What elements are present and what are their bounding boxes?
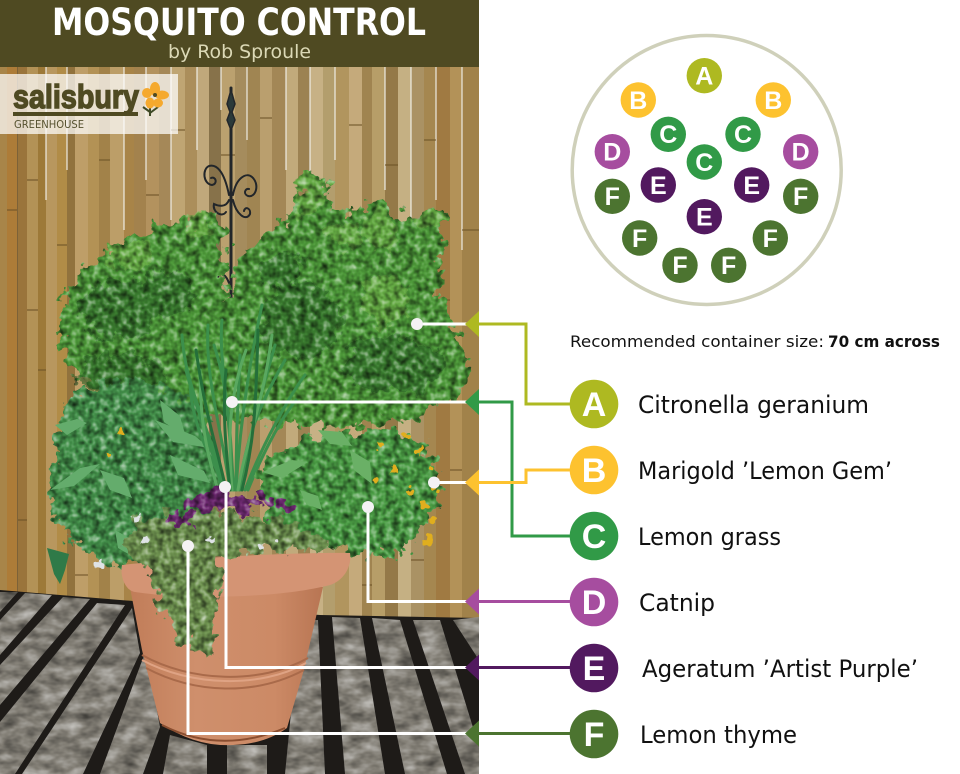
positions B: B xyxy=(629,87,647,115)
legend C: Lemon grass: Lemon grass xyxy=(638,523,781,551)
legend B: Marigold 'Lemon Gem' xyxy=(570,446,892,494)
connector D xyxy=(362,501,572,614)
positions F: F xyxy=(632,225,647,253)
positions C xyxy=(651,117,761,180)
positions D: D xyxy=(792,138,810,166)
positions F xyxy=(595,179,818,283)
logo: Salisbury Greenhouse: GREENHOUSE xyxy=(14,119,84,131)
terracotta pot xyxy=(122,553,350,745)
title: MOSQUITO CONTROL xyxy=(52,1,426,44)
logo: Salisbury Greenhouse: salisbury xyxy=(13,78,140,115)
plant A: citronella geranium bush xyxy=(59,172,467,426)
planting plan circle diagram xyxy=(572,36,841,304)
legend A: Citronella geranium xyxy=(570,380,869,428)
positions C: C xyxy=(695,149,713,177)
positions F: F xyxy=(605,183,620,211)
plant E: ageratum flowers xyxy=(168,490,297,525)
plant D right: catnip foliage xyxy=(259,430,440,555)
position A xyxy=(687,58,722,93)
plant D left: catnip foliage xyxy=(47,380,225,584)
positions B xyxy=(621,82,791,118)
connector E xyxy=(219,481,572,680)
logo: Salisbury Greenhouse xyxy=(0,74,178,134)
connector B xyxy=(428,470,572,496)
legend B: Marigold 'Lemon Gem': Marigold ’Lemon Gem’ xyxy=(638,457,892,485)
legend D: Catnip xyxy=(570,578,715,626)
connector C xyxy=(226,389,572,536)
positions F: F xyxy=(793,183,808,211)
positions D: D xyxy=(603,138,621,166)
legend E: Ageratum 'Artist Purple': E xyxy=(583,650,605,688)
plant F: lemon thyme trailing over pot xyxy=(96,512,335,655)
legend A: Citronella geranium: A xyxy=(582,386,606,424)
container size note: 70 cm across xyxy=(828,332,940,351)
legend E: Ageratum 'Artist Purple' xyxy=(570,644,918,692)
positions C: C xyxy=(659,121,677,149)
byline: by Rob Sproule xyxy=(168,41,311,63)
positions B: B xyxy=(764,87,782,115)
positions F: F xyxy=(721,252,736,280)
positions C: C xyxy=(734,121,752,149)
legend B: Marigold 'Lemon Gem': B xyxy=(582,452,606,490)
bamboo fence xyxy=(0,67,479,620)
photo: herb planter on deck xyxy=(0,67,479,774)
legend F: Lemon thyme xyxy=(570,710,797,758)
plant C: lemon grass blades xyxy=(182,305,305,490)
positions F: F xyxy=(672,252,688,280)
legend C: Lemon grass: C xyxy=(582,518,606,556)
positions E xyxy=(641,167,769,234)
legend A: Citronella geranium: Citronella geranium xyxy=(638,391,869,419)
icon: orange flower xyxy=(142,82,169,116)
title banner xyxy=(0,0,479,67)
container size note xyxy=(570,332,940,351)
legend E: Ageratum 'Artist Purple': Ageratum ’Artist Purple’ xyxy=(642,655,918,683)
container size note: Recommended container size: xyxy=(570,332,824,351)
legend D: Catnip: D xyxy=(582,584,606,622)
positions E: E xyxy=(650,172,667,200)
legend F: Lemon thyme: F xyxy=(584,716,604,754)
wooden deck xyxy=(0,590,479,774)
positions D xyxy=(595,134,818,169)
connector F xyxy=(182,540,572,746)
legend C: Lemon grass xyxy=(570,512,781,560)
positions F: F xyxy=(763,225,778,253)
position A: A xyxy=(695,62,713,90)
plant B: marigold flowers xyxy=(106,429,439,545)
connector A xyxy=(411,311,572,404)
legend F: Lemon thyme: Lemon thyme xyxy=(640,721,797,749)
positions E: E xyxy=(696,204,713,232)
legend D: Catnip: Catnip xyxy=(639,589,715,617)
positions E: E xyxy=(743,172,760,200)
plant support obelisk xyxy=(204,88,256,330)
